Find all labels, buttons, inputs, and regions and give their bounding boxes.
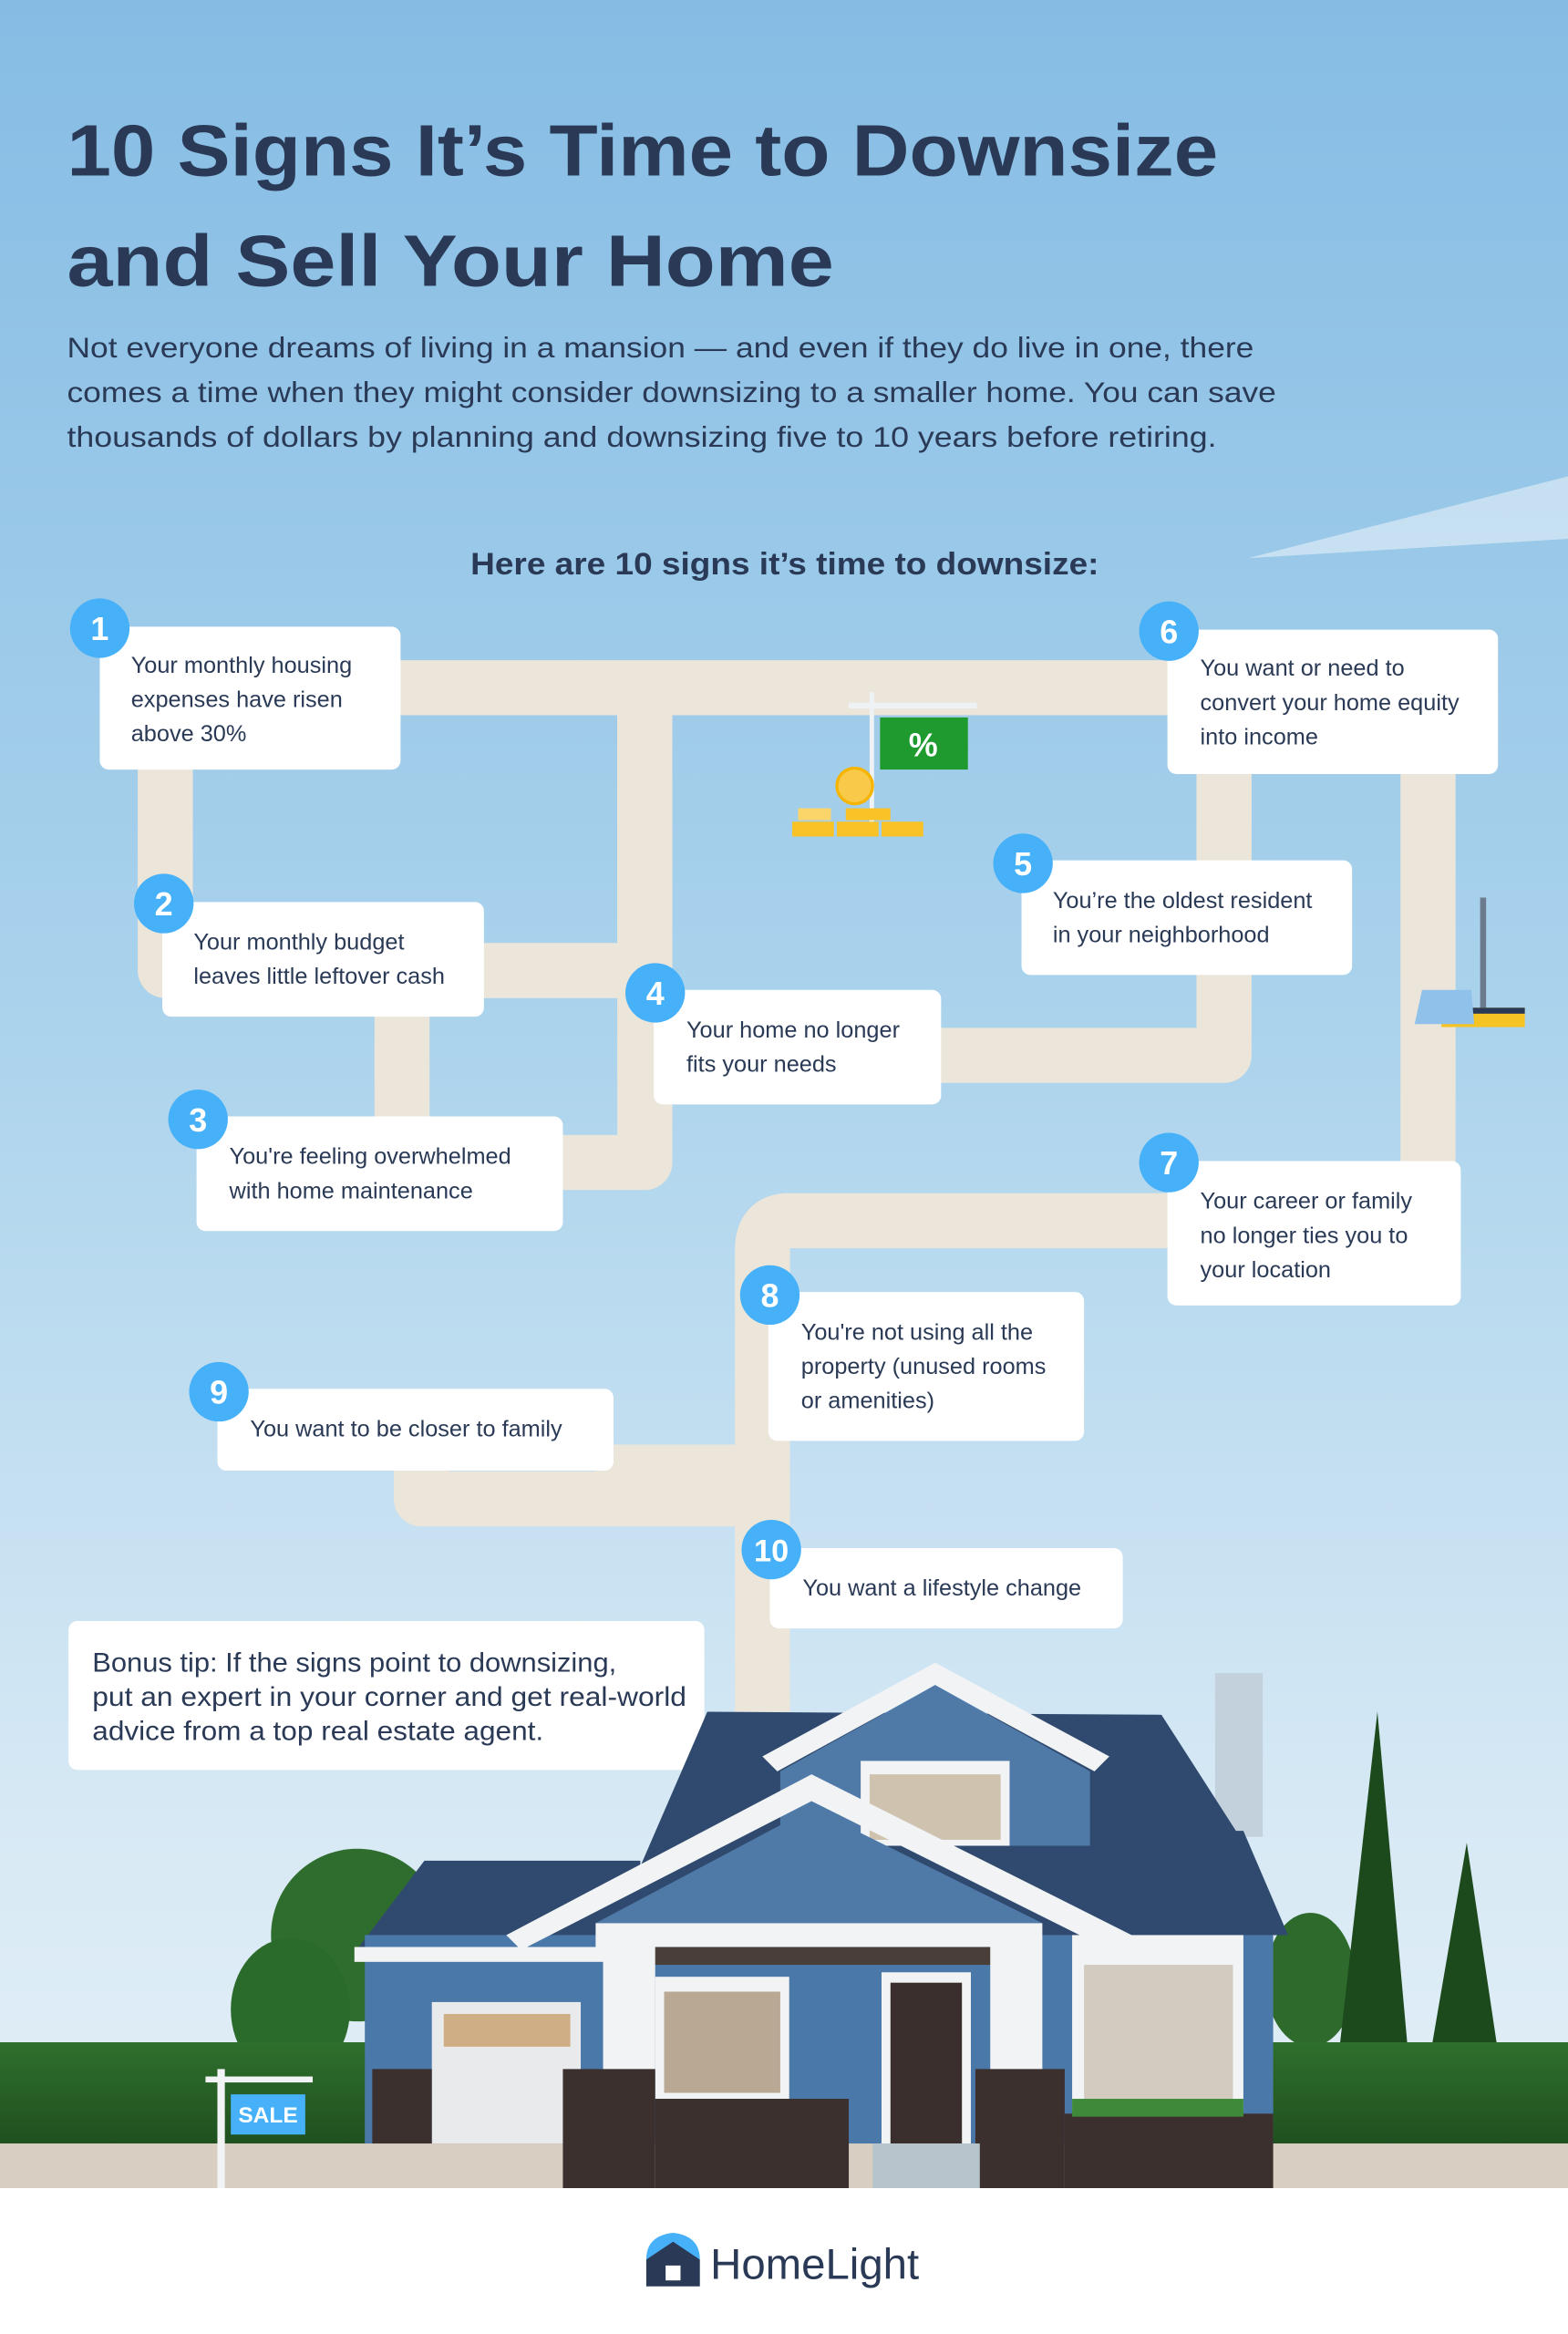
card 7: no longer ties you to [1201, 1223, 1408, 1248]
bonus tip callout: Bonus tip: If the signs point to downsizing, [92, 1647, 616, 1678]
card 9: You want to be closer to family [250, 1417, 562, 1442]
card 5 [993, 833, 1352, 975]
card 3: You're feeling overwhelmed [230, 1144, 511, 1170]
sale sign: SALE [238, 2103, 298, 2128]
card 2: 2 [155, 885, 173, 923]
card 4: fits your needs [686, 1052, 837, 1078]
icon: flag with percent and coins [792, 692, 977, 837]
card 1 [70, 598, 400, 769]
footer [0, 2188, 1568, 2334]
card 6: into income [1201, 724, 1318, 749]
card 1: 1 [90, 610, 108, 647]
card 8: You're not using all the [801, 1319, 1033, 1345]
card 3 [169, 1090, 562, 1231]
logo: HomeLight [646, 2233, 919, 2289]
card 6: 6 [1160, 613, 1178, 650]
card 1: above 30% [131, 721, 246, 747]
card 9: 9 [210, 1374, 228, 1411]
bonus tip callout: advice from a top real estate agent. [92, 1717, 543, 1747]
light beam [1248, 476, 1568, 558]
intro paragraph: thousands of dollars by planning and downsizing five to 10 years before retiring. [67, 421, 1217, 453]
card 8: property (unused rooms [801, 1354, 1046, 1379]
title: and Sell Your Home [67, 220, 834, 301]
card 6: You want or need to [1201, 656, 1405, 681]
title: 10 Signs It’s Time to Downsize [67, 110, 1218, 191]
card 10: You want a lifestyle change [802, 1575, 1081, 1601]
trees and bushes [231, 1712, 1497, 2081]
grass [0, 2042, 1568, 2146]
card 1: expenses have risen [131, 687, 343, 713]
intro paragraph: comes a time when they might consider downsizing to a smaller home. You can save [67, 377, 1276, 408]
card 7: your location [1201, 1257, 1331, 1283]
house [355, 1663, 1288, 2188]
card 4: Your home no longer [686, 1017, 900, 1043]
card 8: or amenities) [801, 1388, 934, 1413]
card 3: 3 [189, 1101, 207, 1139]
card 7: Your career or family [1201, 1189, 1412, 1214]
card 6 [1140, 602, 1498, 774]
title [67, 110, 1218, 301]
bonus tip callout: put an expert in your corner and get real-world [92, 1682, 686, 1712]
card 2: leaves little leftover cash [193, 964, 445, 989]
card 7: 7 [1160, 1144, 1178, 1182]
card 8 [740, 1265, 1084, 1441]
card 4 [625, 963, 941, 1104]
card 2: Your monthly budget [193, 930, 405, 955]
icon: broom and dustpan [1415, 897, 1525, 1028]
card 6: convert your home equity [1201, 690, 1460, 716]
card 10: 10 [754, 1534, 789, 1569]
card 8: 8 [760, 1276, 779, 1314]
card 2 [134, 873, 484, 1017]
intro paragraph [67, 332, 1276, 453]
card 9 [189, 1362, 614, 1471]
card 1: Your monthly housing [131, 653, 352, 678]
card 3: with home maintenance [229, 1178, 473, 1203]
ground [0, 2143, 1568, 2188]
bonus tip callout [68, 1621, 705, 1770]
card 4: 4 [646, 975, 665, 1012]
card 5: 5 [1014, 845, 1032, 883]
card 7 [1140, 1132, 1460, 1306]
intro paragraph: Not everyone dreams of living in a mansion — and even if they do live in one, there [67, 332, 1253, 364]
icon: flag with percent and coins: % [909, 726, 938, 763]
logo: HomeLight: HomeLight [710, 2241, 919, 2289]
subheading: Here are 10 signs it’s time to downsize: [470, 547, 1099, 582]
card 5: in your neighborhood [1053, 922, 1270, 947]
card 10 [741, 1520, 1123, 1628]
sale sign [205, 2069, 313, 2188]
maze paths [165, 687, 1428, 1712]
card 5: You’re the oldest resident [1053, 888, 1312, 914]
